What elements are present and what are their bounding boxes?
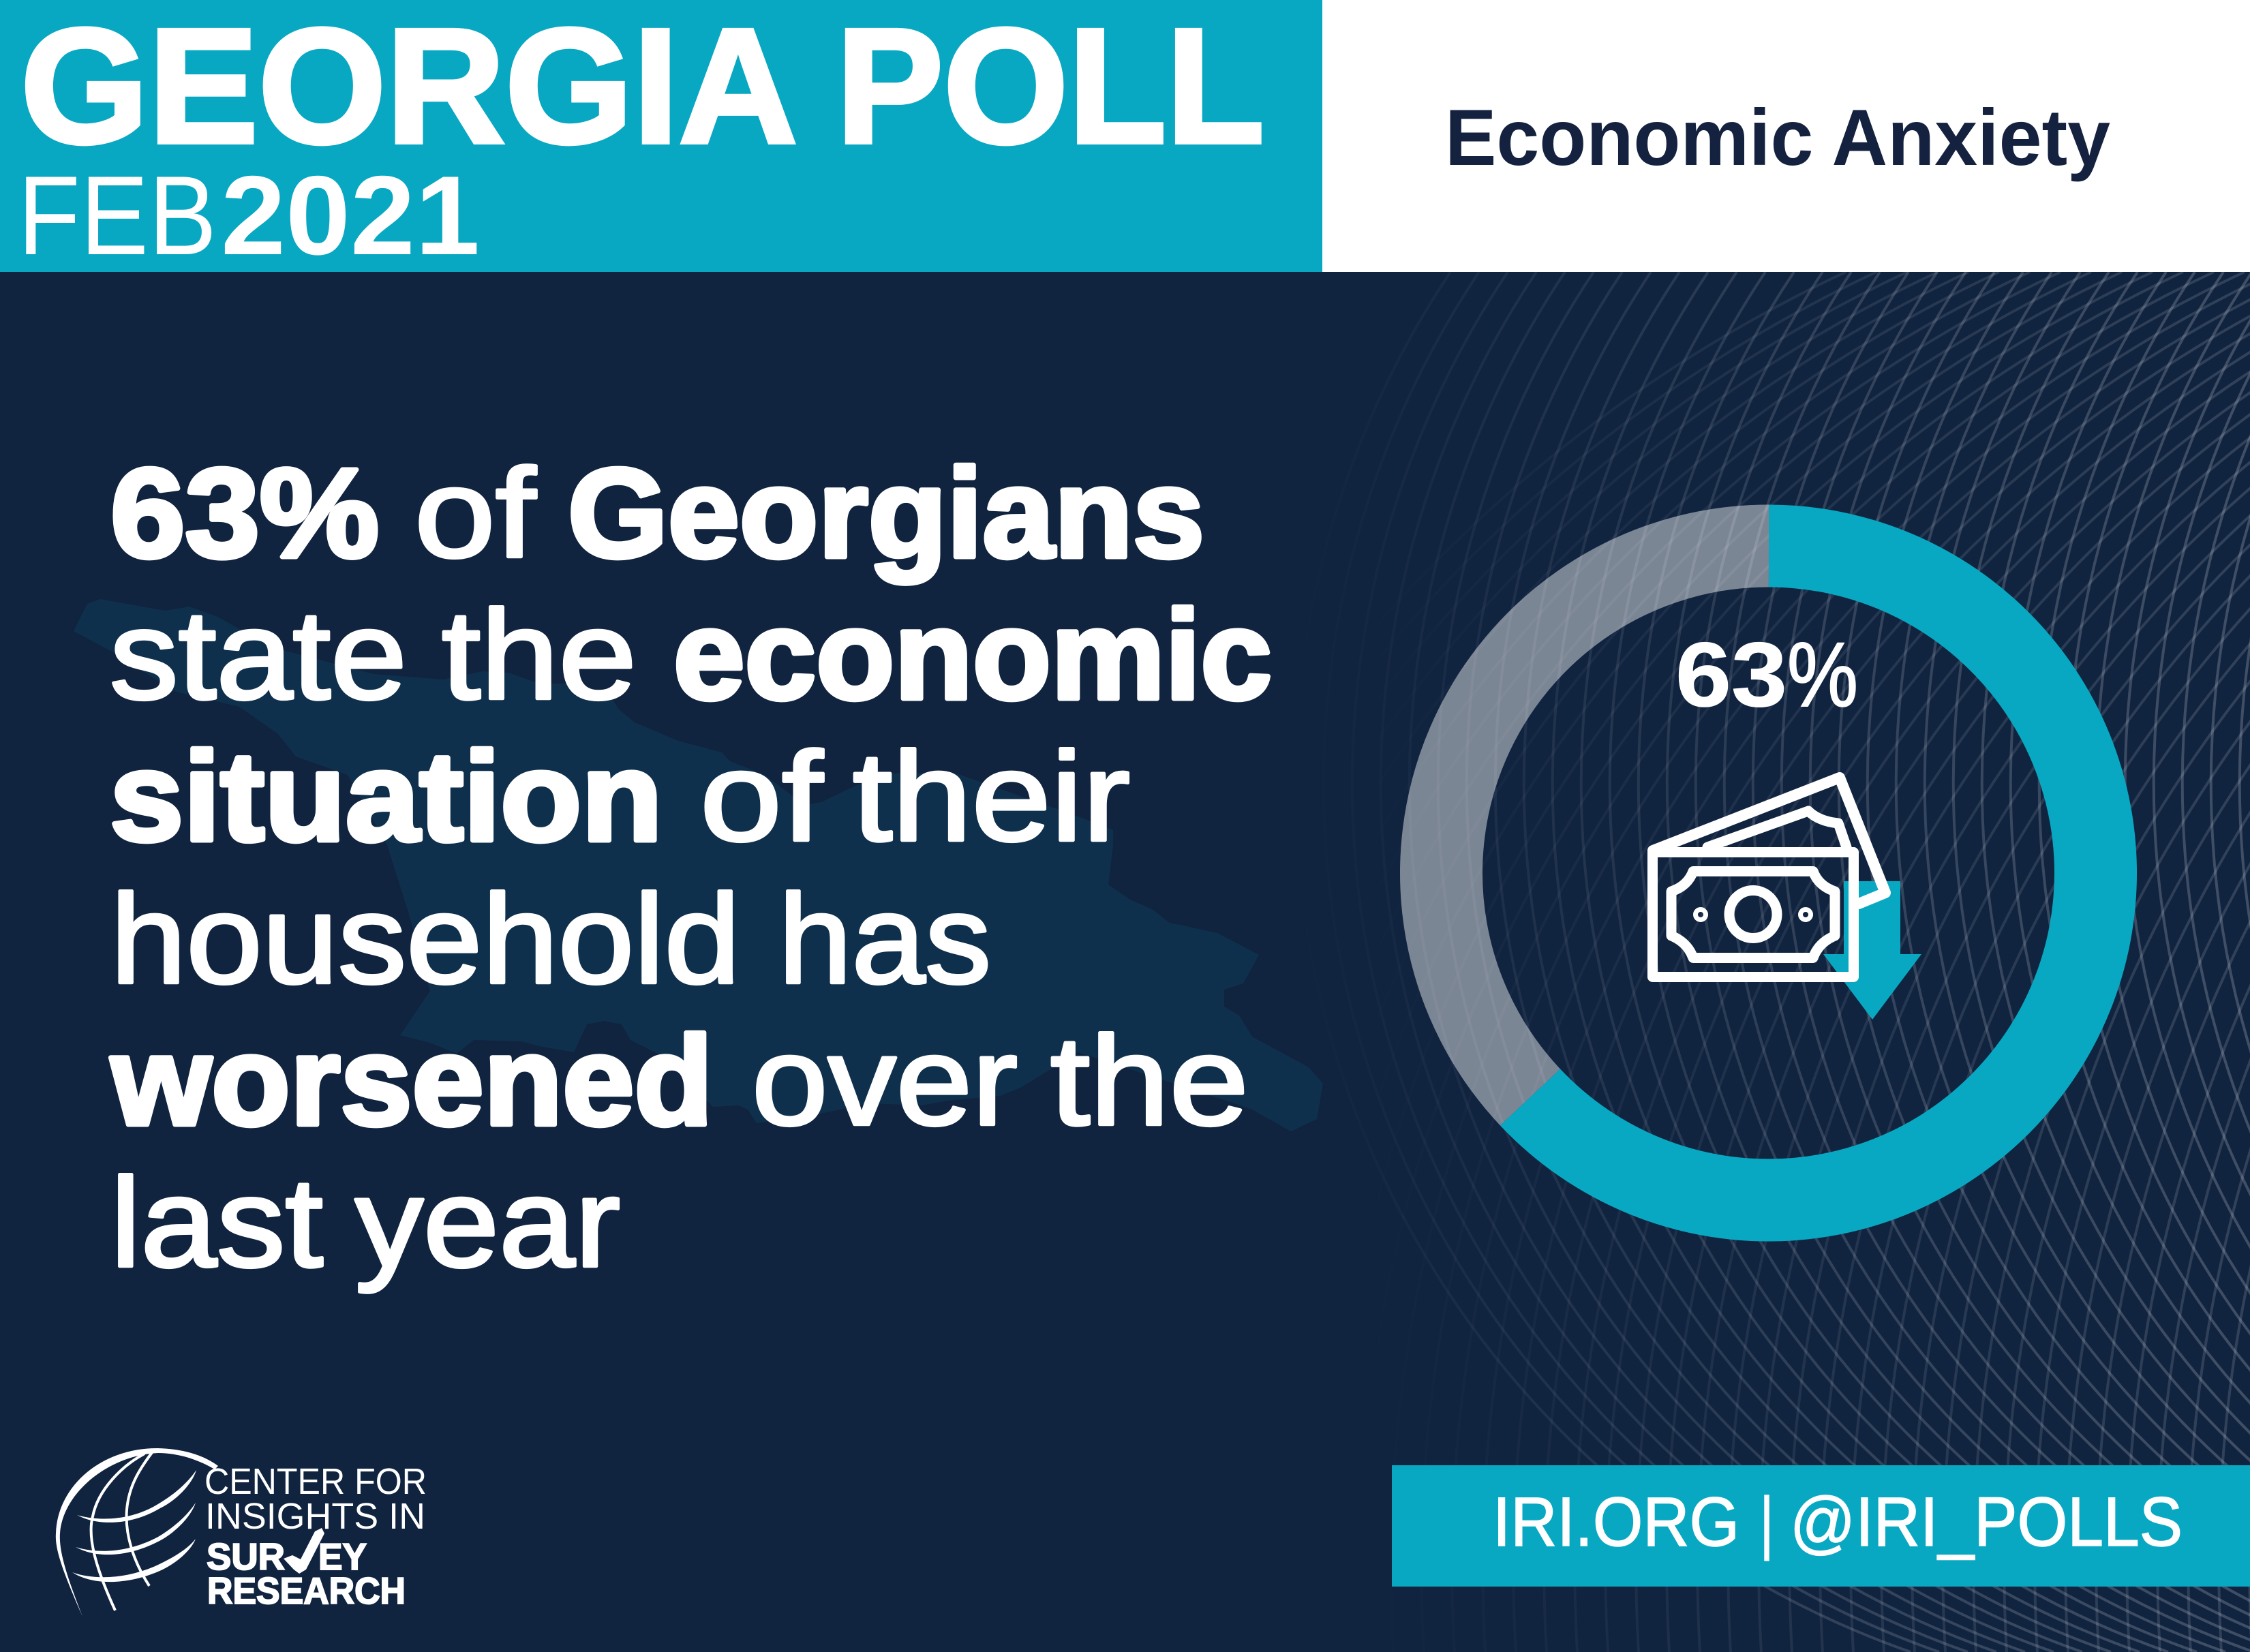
line 1: of bbox=[414, 443, 536, 584]
line 4 bbox=[110, 869, 991, 1010]
topic heading: Economic Anxiety bbox=[1445, 93, 2110, 182]
title: Georgia Poll: POLL bbox=[836, 0, 1264, 177]
logo wordmark: SUR bbox=[207, 1535, 285, 1578]
line 6: year bbox=[355, 1152, 620, 1294]
line 1 bbox=[110, 443, 1204, 584]
logo wordmark: RESEARCH bbox=[207, 1570, 406, 1612]
website and handle bbox=[1493, 1483, 2183, 1561]
website and handle: IRI.ORG bbox=[1493, 1483, 1739, 1561]
line 2 bbox=[110, 585, 1272, 726]
logo: Center for Insights in Survey Research bbox=[56, 1448, 427, 1617]
icon: down arrow bbox=[1823, 881, 1921, 1020]
title: Georgia Poll bbox=[20, 0, 1264, 177]
date: Feb 2021: 2021 bbox=[221, 153, 480, 278]
footer link bar bbox=[1392, 1465, 2250, 1587]
logo globe bbox=[56, 1448, 218, 1617]
ring remainder: 37 percent bbox=[1442, 546, 1769, 1097]
logo wordmark: INSIGHTS IN bbox=[205, 1496, 425, 1537]
line 3: their bbox=[853, 726, 1130, 868]
line 1: 63% bbox=[110, 443, 379, 584]
date: Feb 2021 bbox=[18, 153, 480, 278]
line 5: over bbox=[752, 1011, 1018, 1152]
website and handle: | bbox=[1760, 1483, 1774, 1561]
header: topic panel bbox=[1322, 0, 2250, 272]
logo wordmark: CENTER FOR bbox=[204, 1461, 427, 1502]
line 4: household bbox=[110, 869, 740, 1010]
line 3 bbox=[110, 726, 1130, 868]
line 5: worsened bbox=[110, 1011, 713, 1152]
icon: banknotes bbox=[1652, 778, 1885, 977]
line 1: Georgians bbox=[568, 443, 1204, 584]
website and handle: @IRI_POLLS bbox=[1790, 1483, 2183, 1561]
ring value: 63 percent bbox=[1530, 546, 2096, 1200]
headline statement bbox=[110, 443, 1272, 1294]
date: Feb 2021: FEB bbox=[18, 153, 217, 278]
line 2: economic bbox=[673, 585, 1272, 726]
line 5: the bbox=[1050, 1011, 1249, 1152]
header: poll title panel bbox=[0, 0, 1322, 278]
line 2: the bbox=[442, 585, 637, 726]
line 6: last bbox=[110, 1152, 323, 1294]
line 3: situation bbox=[110, 726, 663, 868]
line 3: of bbox=[700, 726, 823, 868]
logo wordmark bbox=[204, 1461, 427, 1612]
line 4: has bbox=[778, 869, 991, 1010]
donut chart: 63 percent bbox=[1442, 546, 2096, 1200]
line 2: state bbox=[110, 585, 407, 726]
map of Georgia silhouette bbox=[74, 599, 1323, 1131]
donut value label: 63 bbox=[1675, 624, 1787, 726]
logo wordmark: EY bbox=[318, 1535, 367, 1578]
title: Georgia Poll: GEORGIA bbox=[20, 0, 797, 177]
line 6 bbox=[110, 1152, 620, 1294]
donut value label bbox=[1675, 624, 1858, 726]
line 5 bbox=[110, 1011, 1249, 1152]
donut value label: % bbox=[1787, 624, 1858, 726]
